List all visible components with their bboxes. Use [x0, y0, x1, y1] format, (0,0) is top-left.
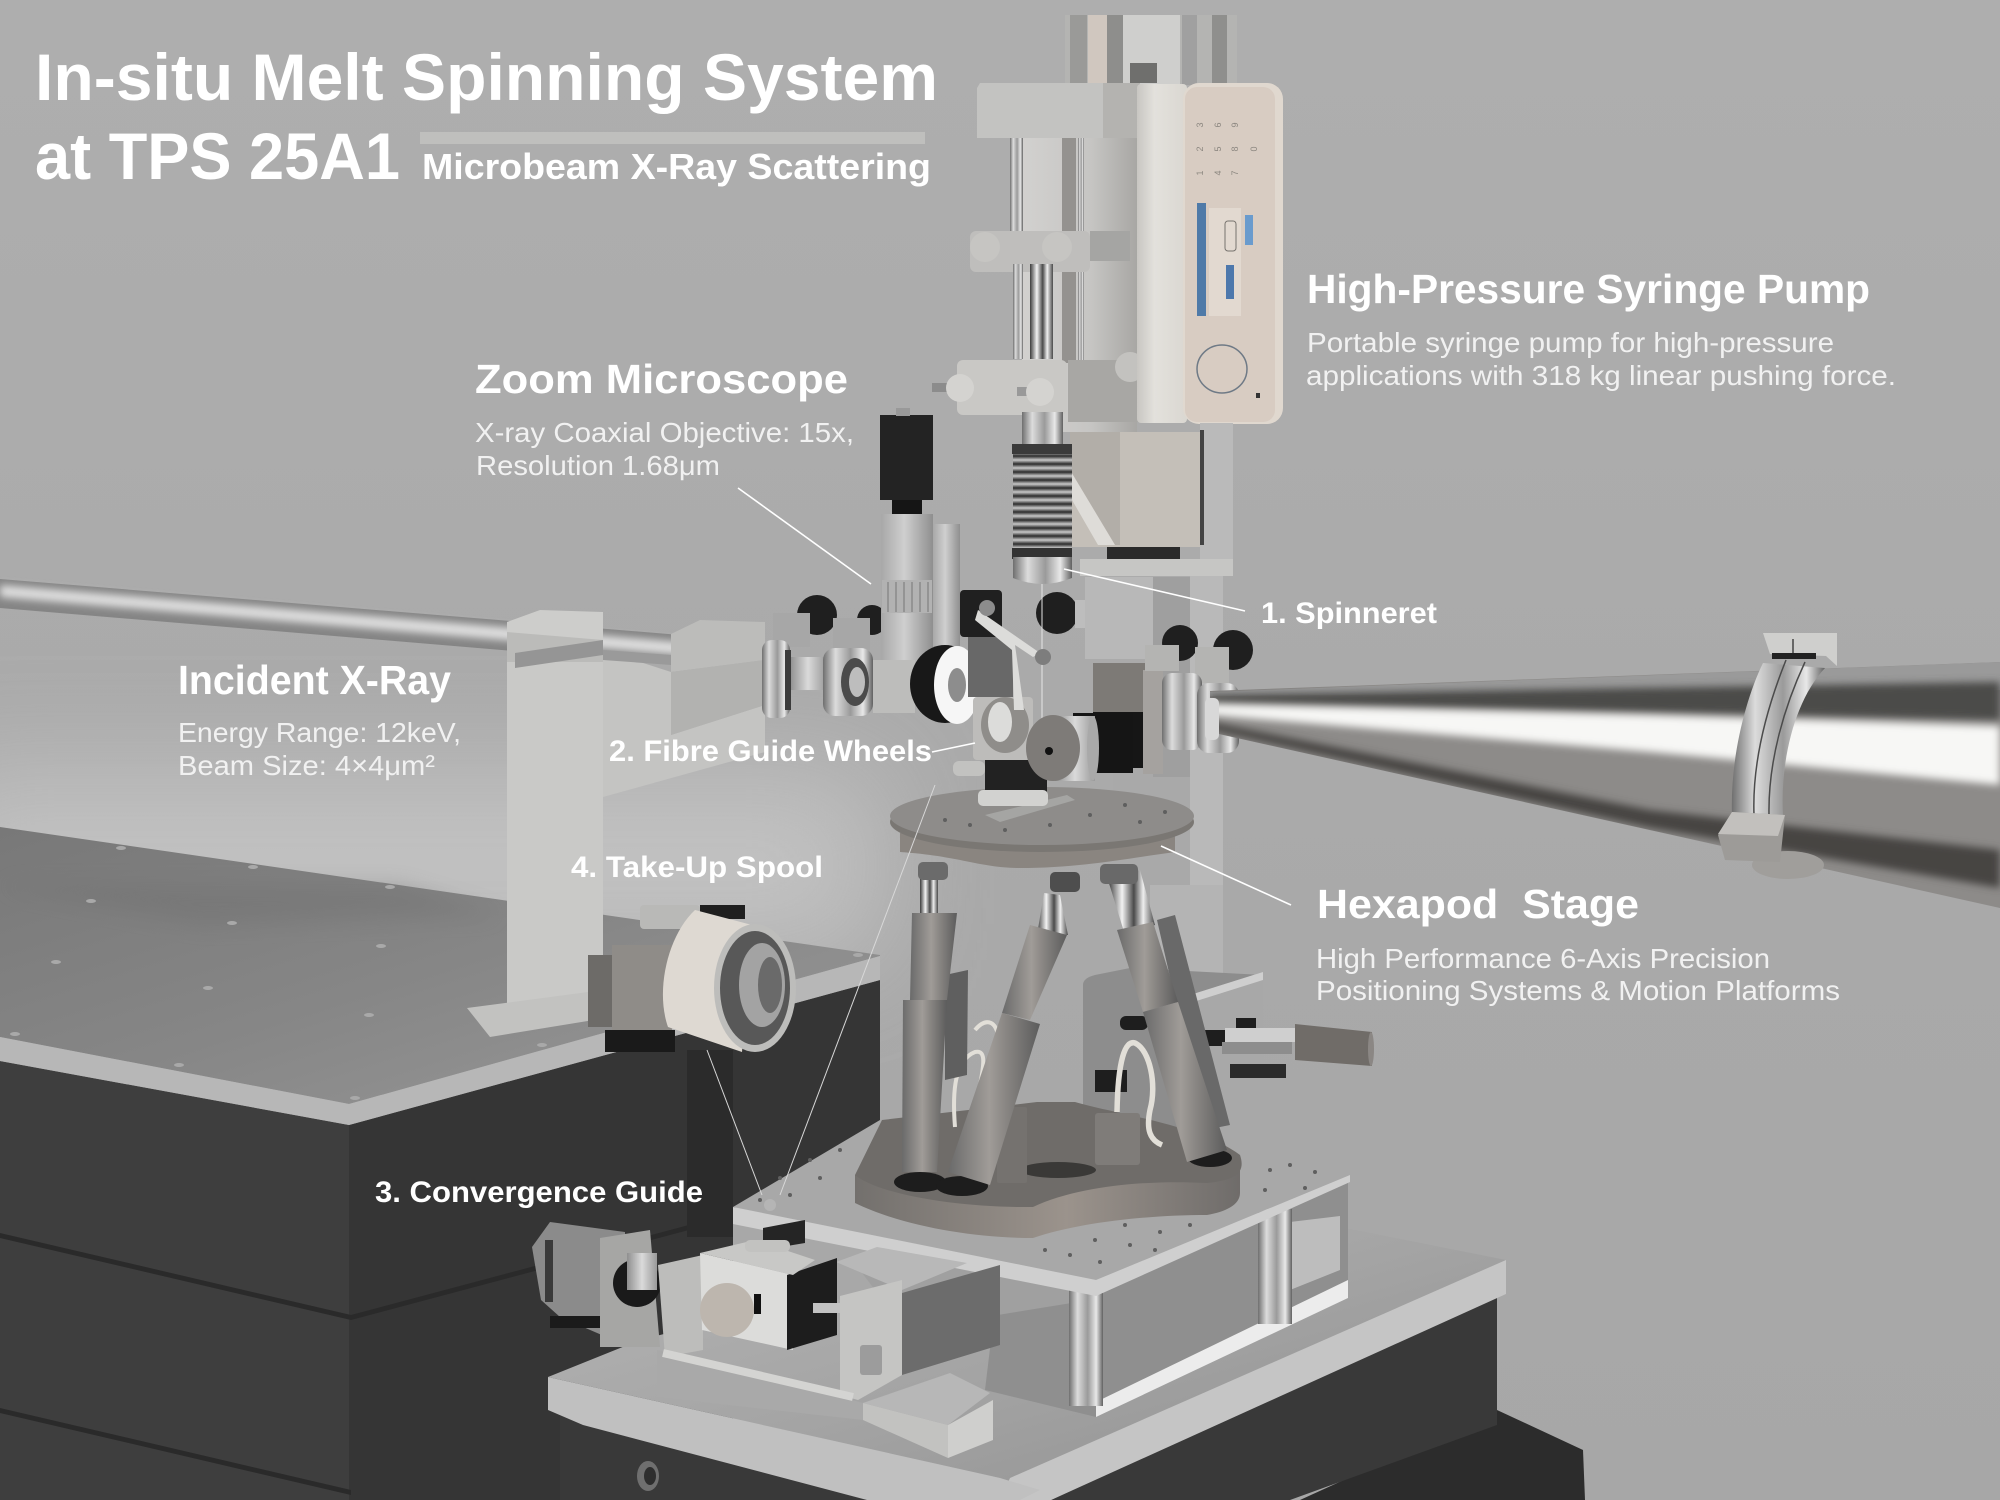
label: fibre guide wheels: 2. Fibre Guide Wheels [609, 735, 932, 768]
central table [548, 1219, 1585, 1500]
downstream cone pipe [1210, 650, 2000, 920]
label: take-up spool: 4. Take-Up Spool [571, 851, 823, 884]
lower frame and support posts [860, 1180, 1348, 1417]
label: zoom microscope: Zoom Microscope [475, 356, 848, 402]
high-pressure syringe pump: 4 [1213, 170, 1223, 176]
high-pressure syringe pump: 8 [1230, 146, 1240, 152]
hexapod cables [954, 1022, 1162, 1145]
label: zoom microscope: Resolution 1.68μm [476, 450, 720, 481]
incident x-ray beam pipe [0, 579, 790, 690]
leader line: fibre guide wheels [932, 743, 975, 752]
hexapod side slide and knob [1222, 1024, 1374, 1078]
label: hexapod stage: Hexapod Stage [1317, 881, 1639, 927]
leader line: zoom microscope [738, 488, 871, 584]
syringe pump rail and mount [1065, 15, 1237, 85]
hexapod top platform [890, 787, 1194, 868]
take-up spool [588, 905, 796, 1237]
spinneret and bellows [1012, 412, 1233, 760]
label: convergence guide: 3. Convergence Guide [375, 1176, 703, 1209]
subtitle with rule: Microbeam X-Ray Scattering [422, 146, 931, 187]
label: zoom microscope: X-ray Coaxial Objective: 15x, [475, 417, 854, 448]
lower support block [657, 1247, 1000, 1458]
label: high-pressure syringe pump: applications with 318 kg linear pushing force. [1306, 360, 1896, 391]
high-pressure syringe pump: 6 [1213, 122, 1223, 128]
hexapod base [855, 1102, 1242, 1238]
label: hexapod stage [1316, 881, 1840, 1006]
left optical table [0, 827, 880, 1500]
high-pressure syringe pump: 1 [1195, 170, 1205, 176]
hexapod actuator legs [902, 862, 1230, 1185]
leader line: spinneret [1064, 569, 1245, 611]
title: In-situ Melt Spinning System [35, 40, 938, 114]
high-pressure syringe pump: 5 [1213, 146, 1223, 152]
cone pipe collar [1205, 698, 1219, 740]
fibre guide wheels [953, 590, 1051, 806]
label: high-pressure syringe pump [1306, 266, 1896, 391]
label: incident x-ray: Incident X-Ray [178, 657, 451, 703]
high-pressure syringe pump: 0 [1249, 146, 1259, 152]
vacuum flanges and clamps [762, 595, 887, 718]
hexapod breadboard [733, 1120, 1350, 1296]
high-pressure syringe pump: 9 [1230, 122, 1240, 128]
label: spinneret: 1. Spinneret [1261, 597, 1437, 630]
leader line: hexapod stage [1161, 846, 1291, 905]
title: at TPS 25A1 [35, 119, 400, 193]
right vacuum box and roller [1026, 625, 1253, 781]
high-pressure syringe pump: 2 [1195, 146, 1205, 152]
zoom microscope [873, 408, 980, 724]
convergence guide and winder [532, 1199, 902, 1400]
high-pressure syringe pump: 3 [1195, 122, 1205, 128]
label: high-pressure syringe pump: High-Pressure Syringe Pump [1307, 266, 1870, 312]
label: high-pressure syringe pump: Portable syringe pump for high-pressure [1307, 327, 1834, 358]
v-band clamp on cone [1718, 633, 1837, 879]
label: hexapod stage: High Performance 6-Axis Precision [1316, 943, 1770, 974]
label: zoom microscope [475, 356, 854, 481]
title [35, 40, 938, 193]
fibre path [707, 785, 935, 1195]
vertical column behind the stage [1085, 560, 1223, 995]
label: hexapod stage: Positioning Systems & Motion Platforms [1316, 975, 1840, 1006]
label: incident x-ray: Beam Size: 4×4μm² [178, 750, 435, 781]
label: incident x-ray: Energy Range: 12keV, [178, 717, 461, 748]
label: incident x-ray [178, 657, 461, 781]
rear motion block [1083, 968, 1263, 1153]
high-pressure syringe pump [932, 83, 1283, 432]
high-pressure syringe pump: 7 [1230, 170, 1240, 176]
pipe support post [467, 610, 765, 1037]
